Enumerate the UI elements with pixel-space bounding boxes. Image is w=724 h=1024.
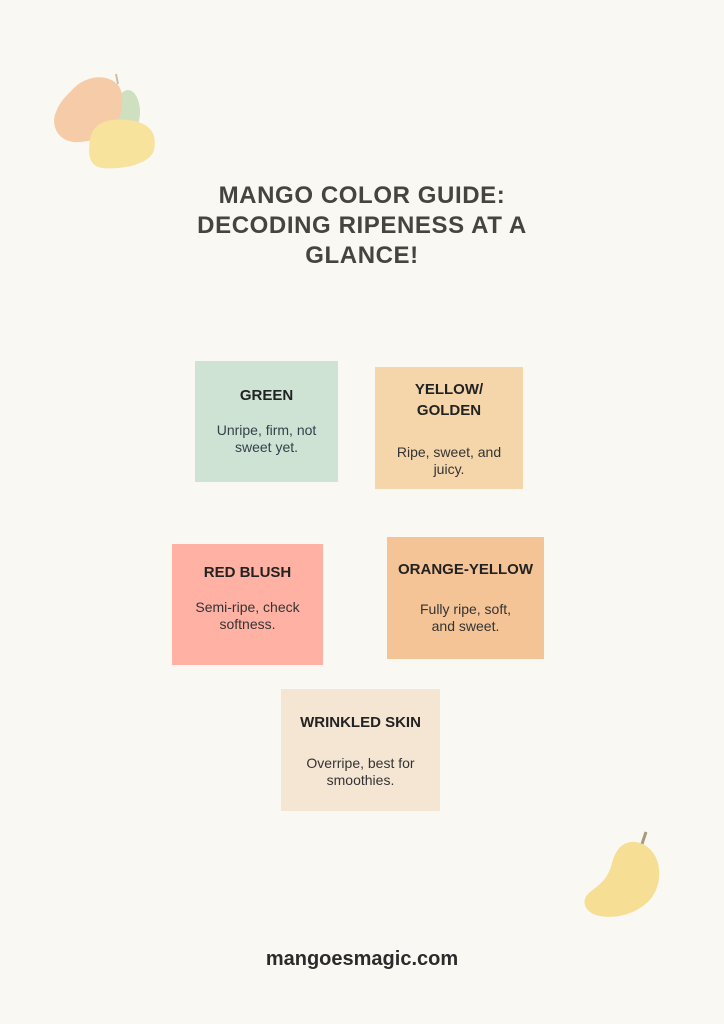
- title: DECODING RIPENESS AT A: [197, 212, 527, 239]
- title: MANGO COLOR GUIDE:: [219, 182, 505, 209]
- panel: red blush: RED BLUSH: [204, 564, 291, 581]
- panel: wrinkled skin: [281, 689, 440, 811]
- panel: wrinkled skin: Overripe, best for: [306, 755, 415, 771]
- panel: green: [195, 361, 338, 482]
- panel: yellow/golden: [375, 367, 523, 489]
- panel: red blush: [172, 544, 323, 665]
- panel: green: sweet yet.: [235, 439, 298, 455]
- title: GLANCE!: [305, 242, 419, 269]
- title: [197, 182, 527, 269]
- panel: green: GREEN: [240, 387, 293, 404]
- panel: red blush: softness.: [219, 616, 276, 632]
- panel: orange-yellow: ORANGE-YELLOW: [398, 561, 533, 578]
- panel: orange-yellow: Fully ripe, soft,: [420, 601, 511, 617]
- panel: orange-yellow: [387, 537, 544, 659]
- footer url: mangoesmagic.com: [266, 948, 458, 970]
- panel: yellow/golden: juicy.: [434, 461, 464, 477]
- panel: green: Unripe, firm, not: [217, 422, 316, 438]
- panel: yellow/golden: YELLOW/: [415, 381, 483, 398]
- panel: yellow/golden: Ripe, sweet, and: [397, 444, 501, 460]
- panel: wrinkled skin: smoothies.: [327, 772, 394, 788]
- panel: orange-yellow: and sweet.: [432, 618, 499, 634]
- icon: mango bottom-right: [584, 832, 660, 917]
- panel: red blush: Semi-ripe, check: [195, 599, 300, 615]
- panel: yellow/golden: GOLDEN: [417, 402, 481, 419]
- icon: mangoes top-left: [54, 74, 155, 168]
- panel: wrinkled skin: WRINKLED SKIN: [300, 714, 421, 731]
